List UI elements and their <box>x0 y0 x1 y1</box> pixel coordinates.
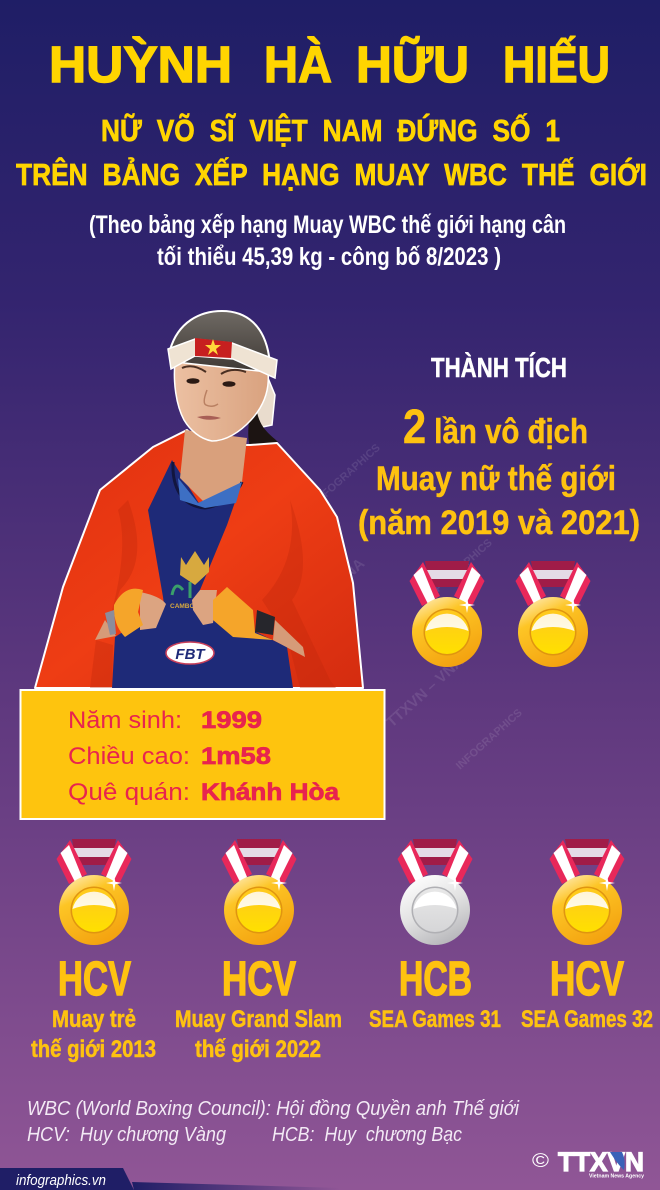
medal column: Muay trẻ: Muay trẻ <box>52 1006 136 1033</box>
subtitle <box>16 112 647 192</box>
glossary: HCV: Huy chương Vàng <box>27 1124 226 1146</box>
title: HỮU <box>356 35 469 93</box>
medal column: Muay trẻ: HCV <box>58 953 131 1006</box>
hometown: Khánh Hòa <box>201 779 340 806</box>
jersey top <box>148 460 242 612</box>
watermarks: INFOGRAPHICS <box>424 537 495 602</box>
hometown: Quê quán: <box>68 779 190 806</box>
height: 1m58 <box>201 743 271 770</box>
medal column: SEA Games 32 <box>521 839 653 1033</box>
jersey badge: FBT <box>175 646 206 663</box>
title: HIẾU <box>503 35 610 93</box>
left forearm <box>95 620 116 640</box>
headband <box>168 339 277 378</box>
right wrist band <box>255 610 275 635</box>
watermarks: INFOGRAPHICS <box>312 442 383 507</box>
world champion line 3: (năm 2019 và 2021) <box>358 504 640 542</box>
glossary <box>27 1098 520 1146</box>
star <box>205 339 221 355</box>
watermarks: INFOGRAPHICS <box>454 707 525 772</box>
TTXVN logo: TTXVN <box>558 1147 644 1177</box>
watermarks: TTXVN – VNA <box>284 555 368 633</box>
headband flag <box>195 338 232 358</box>
ranking note: tối thiểu 45,39 kg - công bố 8/2023 ) <box>157 243 501 271</box>
glossary: HCB: Huy chương Bạc <box>272 1124 462 1146</box>
right fingers <box>192 590 217 625</box>
medal column: SEA Games 32: HCV <box>550 953 624 1006</box>
left wrist band <box>105 610 116 635</box>
cape fold shadows <box>90 500 336 688</box>
hair <box>170 311 269 378</box>
medal column: Muay trẻ: thế giới 2013 <box>31 1036 156 1063</box>
achievements heading: THÀNH TÍCH <box>431 352 567 383</box>
title: HUỲNH <box>49 35 232 93</box>
undershirt <box>178 478 242 508</box>
world champion count: 2 lần vô địch <box>403 401 588 454</box>
watermarks: TTXVN – VNA <box>383 653 467 731</box>
collar <box>173 462 242 508</box>
medal column: SEA Games 31: HCB <box>399 953 472 1006</box>
hometown <box>68 779 340 806</box>
left fingers <box>140 592 166 630</box>
height <box>68 743 271 770</box>
medal column: Grand Slam: thế giới 2022 <box>195 1036 321 1063</box>
eyes and brows <box>182 366 246 420</box>
jersey bottom <box>112 605 293 688</box>
jersey badge <box>166 642 214 664</box>
hair net behind <box>254 378 275 428</box>
icon: gold medal 2019 <box>410 561 484 667</box>
medal column: Grand Slam: HCV <box>222 953 296 1006</box>
right hand wrap <box>213 587 273 640</box>
medal column: Grand Slam: Muay Grand Slam <box>175 1006 342 1033</box>
TTXVN logo: © <box>532 1151 549 1172</box>
achievements <box>358 352 640 542</box>
left hand wrap <box>114 589 143 637</box>
glossary: WBC (World Boxing Council): Hội đồng Quyền anh Thế giới <box>27 1098 520 1120</box>
subtitle: NỮ VÕ SĨ VIỆT NAM ĐỨNG SỐ 1 <box>101 112 560 148</box>
ranking note <box>89 211 566 271</box>
athlete portrait <box>35 311 363 688</box>
right forearm <box>273 620 305 657</box>
birth year: Năm sinh: <box>68 707 182 734</box>
face <box>174 362 268 441</box>
website: infographics.vn <box>16 1172 106 1189</box>
info box <box>20 690 384 819</box>
medal column: Grand Slam <box>175 839 342 1063</box>
ponytail <box>248 405 278 446</box>
flag cape <box>35 430 363 688</box>
emblem on jersey <box>180 551 209 585</box>
birth year <box>68 707 262 734</box>
watermarks <box>284 442 525 772</box>
title: HÀ <box>264 36 332 93</box>
medal column: SEA Games 31 <box>369 839 501 1033</box>
birth year: 1999 <box>201 707 262 734</box>
medal column: Muay trẻ <box>31 839 156 1063</box>
neck <box>180 430 247 503</box>
TTXVN logo: Vietnam News Agency <box>589 1174 644 1180</box>
icon: gold medal 2021 <box>516 561 590 667</box>
footer bar <box>0 1168 340 1190</box>
TTXVN logo <box>532 1147 644 1180</box>
medal column: SEA Games 31: SEA Games 31 <box>369 1006 501 1033</box>
height: Chiều cao: <box>68 743 190 770</box>
title <box>16 35 647 192</box>
jersey text: CAMBODIA <box>170 603 206 610</box>
world champion line 2: Muay nữ thế giới <box>376 460 616 498</box>
